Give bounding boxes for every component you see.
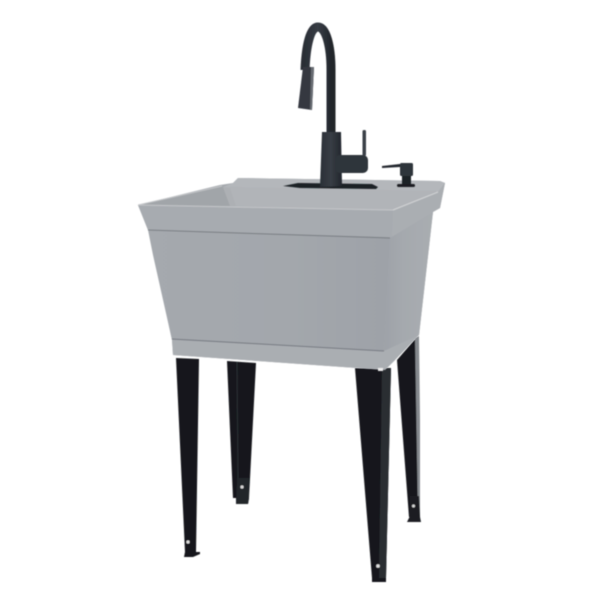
right wall (384, 212, 433, 351)
back deck (223, 178, 445, 192)
soap dispenser (382, 163, 415, 187)
back left leg (227, 361, 256, 504)
tub silhouette (138, 178, 445, 370)
front rim face (138, 205, 393, 237)
handle lever (362, 130, 366, 156)
tub (138, 178, 445, 371)
front right leg (355, 368, 391, 582)
faucet (283, 27, 378, 189)
deck plate (283, 183, 378, 189)
handle body (335, 155, 368, 173)
basin inner wall (138, 186, 230, 206)
back right leg (397, 336, 421, 522)
bottom band (172, 335, 419, 370)
sprayer head (298, 67, 314, 110)
front left leg (176, 358, 200, 557)
front wall (149, 231, 390, 351)
faucet base (320, 132, 342, 187)
right rim face (392, 183, 445, 237)
gooseneck spout (305, 27, 331, 134)
